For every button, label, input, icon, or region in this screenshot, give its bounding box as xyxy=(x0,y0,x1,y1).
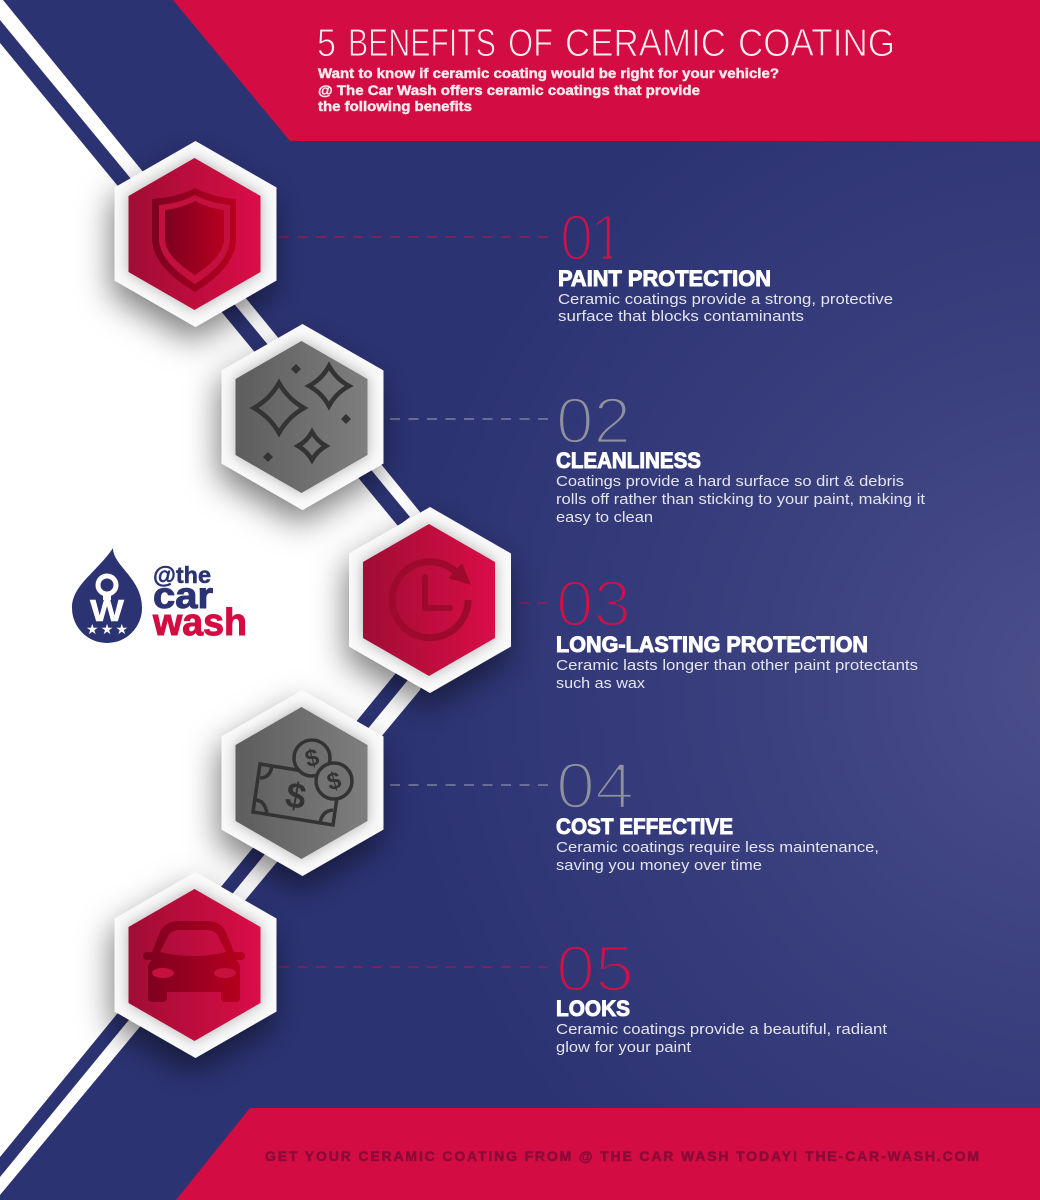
title: BENEFITS xyxy=(348,22,496,65)
hexagon 3: clock xyxy=(349,507,511,693)
description: saving you money over time xyxy=(556,857,762,874)
logo wordmark xyxy=(152,562,247,644)
title: OF xyxy=(508,22,553,65)
title xyxy=(317,22,895,65)
description: Coatings provide a hard surface so dirt & debris xyxy=(556,473,904,490)
heading: LONG-LASTING PROTECTION xyxy=(556,632,868,657)
benefit 01 xyxy=(558,216,892,321)
number 04: 04 xyxy=(556,749,634,822)
description xyxy=(558,291,893,325)
number 05: 05 xyxy=(556,932,634,1005)
number 03: 03 xyxy=(556,567,631,640)
number 01: 1 xyxy=(589,201,625,274)
hexagon 5: car xyxy=(114,872,276,1058)
benefit 04 xyxy=(556,749,879,874)
description: Ceramic lasts longer than other paint protectants xyxy=(556,657,918,674)
icon: money xyxy=(253,740,352,825)
intro text: Want to know if ceramic coating would be right for your vehicle? xyxy=(318,65,779,81)
hexagon 2: sparkles xyxy=(222,324,384,510)
number 01 xyxy=(564,216,612,260)
intro text: the following benefits xyxy=(318,98,472,114)
number 01: 0 xyxy=(560,201,593,274)
benefit 02 xyxy=(556,384,926,526)
connector lines xyxy=(279,237,548,967)
hexagon 1: shield xyxy=(114,141,276,327)
description xyxy=(556,839,879,874)
description: easy to clean xyxy=(556,509,653,526)
icon: shield xyxy=(152,188,236,292)
logo xyxy=(72,548,247,644)
icon: money: $ xyxy=(282,774,309,817)
description xyxy=(556,473,926,526)
logo drop xyxy=(72,548,142,643)
description xyxy=(556,1021,888,1056)
icon: money: $ xyxy=(302,744,323,773)
icon: money: $ xyxy=(324,767,345,796)
benefit 03 xyxy=(556,567,918,692)
logo wordmark: car xyxy=(153,575,213,616)
title: COATING xyxy=(738,22,895,65)
icon: sparkles xyxy=(254,364,351,462)
heading: LOOKS xyxy=(556,996,630,1021)
heading: CLEANLINESS xyxy=(556,448,701,473)
logo wordmark: @the xyxy=(153,562,211,588)
title: CERAMIC xyxy=(565,22,726,65)
description: surface that blocks contaminants xyxy=(558,308,804,325)
description: Ceramic coatings require less maintenance, xyxy=(556,839,879,856)
description: rolls off rather than sticking to your paint, making it xyxy=(556,491,926,508)
diagonal stripes xyxy=(0,20,412,1177)
header banner xyxy=(173,0,1040,141)
description: Ceramic coatings provide a strong, protective xyxy=(558,291,893,308)
logo wordmark: wash xyxy=(152,602,247,644)
footer text: GET YOUR CERAMIC COATING FROM @ THE CAR WASH TODAY! THE-CAR-WASH.COM xyxy=(265,1148,979,1164)
logo drop: ★★★ xyxy=(86,622,128,638)
heading: COST EFFECTIVE xyxy=(556,814,733,839)
footer banner xyxy=(176,1108,1040,1200)
intro text: @ The Car Wash offers ceramic coatings that provide xyxy=(318,82,700,98)
description: such as wax xyxy=(556,675,646,692)
hexagon 4: money xyxy=(222,690,384,876)
description: Ceramic coatings provide a beautiful, radiant xyxy=(556,1021,888,1038)
intro text xyxy=(318,65,779,114)
icon: clock with arrow xyxy=(392,562,470,638)
description xyxy=(556,657,918,692)
heading: PAINT PROTECTION xyxy=(558,266,771,291)
icon: car xyxy=(143,921,245,1002)
logo drop: W xyxy=(90,593,125,628)
number 02: 02 xyxy=(556,384,631,457)
benefit 05 xyxy=(556,932,888,1056)
title: 5 xyxy=(317,22,336,65)
description: glow for your paint xyxy=(556,1039,692,1056)
